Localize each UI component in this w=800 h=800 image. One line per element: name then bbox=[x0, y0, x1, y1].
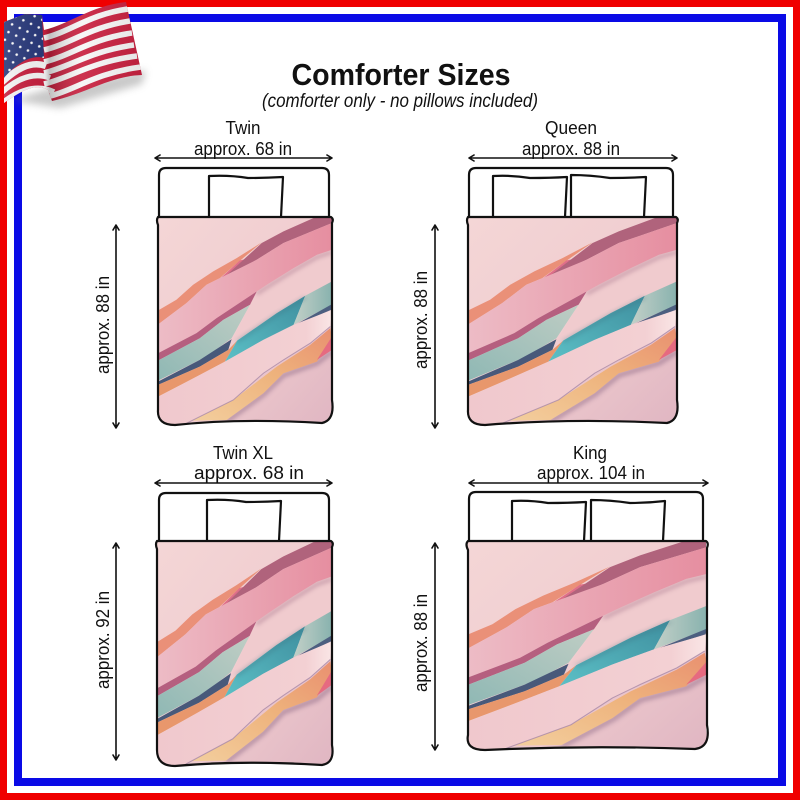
King length arrow bbox=[432, 543, 438, 750]
Queen width arrow bbox=[469, 155, 677, 161]
Queen width label: approx. 88 in bbox=[522, 139, 620, 159]
Twin headboard bbox=[159, 168, 329, 217]
Queen left pillow bbox=[493, 176, 567, 217]
Twin XL comforter bbox=[156, 541, 333, 766]
Twin XL size label: Twin XL bbox=[213, 443, 273, 463]
Twin size label: Twin bbox=[226, 118, 260, 138]
panel: King bed bbox=[411, 443, 708, 750]
Queen comforter bbox=[467, 217, 678, 425]
subtitle: (comforter only - no pillows included) bbox=[262, 91, 538, 112]
Twin width label: approx. 68 in bbox=[194, 139, 292, 159]
Twin XL length label: approx. 92 in bbox=[93, 591, 113, 689]
panel: Twin XL bed bbox=[93, 443, 333, 766]
Twin XL pillow bbox=[207, 500, 281, 541]
Queen right pillow bbox=[571, 175, 646, 217]
King headboard bbox=[469, 492, 703, 541]
Twin XL headboard bbox=[159, 493, 329, 541]
panel: Twin bed bbox=[93, 118, 333, 428]
King width arrow bbox=[469, 480, 708, 486]
Queen headboard bbox=[469, 168, 673, 217]
King comforter bbox=[466, 541, 708, 750]
King right pillow bbox=[591, 500, 665, 541]
Queen length label: approx. 88 in bbox=[411, 271, 431, 369]
title: Comforter Sizes bbox=[292, 57, 510, 92]
Twin XL width arrow bbox=[155, 480, 332, 486]
panel: Queen bed bbox=[411, 118, 678, 428]
King size label: King bbox=[573, 443, 607, 463]
Queen size label: Queen bbox=[545, 118, 597, 138]
Twin length arrow bbox=[113, 225, 119, 428]
King left pillow bbox=[512, 501, 586, 541]
Queen length arrow bbox=[432, 225, 438, 428]
icon: waving American flag bbox=[0, 0, 150, 110]
Twin pillow bbox=[209, 176, 283, 217]
Twin XL width label: approx. 68 in bbox=[194, 463, 304, 483]
Twin comforter bbox=[157, 217, 333, 425]
Twin XL length arrow bbox=[113, 543, 119, 760]
King width label: approx. 104 in bbox=[537, 463, 645, 483]
Twin width arrow bbox=[155, 155, 332, 161]
King length label: approx. 88 in bbox=[411, 594, 431, 692]
Twin length label: approx. 88 in bbox=[93, 276, 113, 374]
